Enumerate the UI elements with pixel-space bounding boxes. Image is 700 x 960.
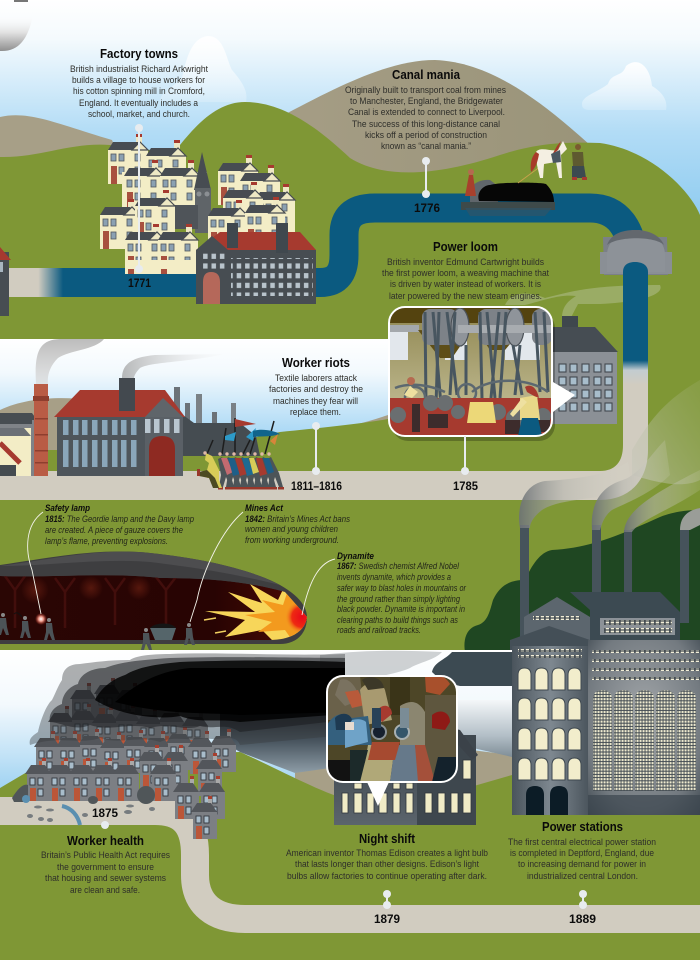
connector: power stations bbox=[579, 890, 587, 909]
connector: night shift bbox=[383, 890, 391, 909]
text block: Dynamite: clearing paths to build things such as bbox=[337, 615, 458, 625]
green patch beside factory bbox=[48, 450, 57, 471]
text block: Mines Act bbox=[245, 503, 350, 545]
text: Night shift body bbox=[286, 848, 488, 882]
green hill: lower section bbox=[0, 752, 512, 840]
connector: worker riots bbox=[312, 422, 320, 475]
text: Power loom body: later powered by the new steam engines. bbox=[389, 291, 542, 302]
tan hill: mid section bbox=[0, 398, 388, 450]
arch: canal aqueduct bbox=[600, 230, 672, 275]
text: Power loom body bbox=[382, 257, 549, 302]
heading: Power stations: Power stations bbox=[542, 819, 623, 834]
illustration: miners bbox=[0, 613, 195, 650]
text block: Dynamite bbox=[337, 551, 467, 635]
text: Canal mania body: Originally built to transport coal from mines bbox=[345, 85, 506, 96]
text block: Safety lamp: are created. A piece of gauze covers the bbox=[45, 525, 183, 535]
sky band: worker riots section bbox=[0, 339, 388, 474]
road: upper bbox=[0, 378, 648, 500]
text: Power stations body: is completed in Deptford, England, due bbox=[510, 848, 654, 859]
illustration: coal barge bbox=[461, 169, 555, 216]
text block: Mines Act: 1842: Britain’s Mines Act bans bbox=[245, 514, 350, 524]
smoke: power station plumes bbox=[519, 380, 700, 532]
text: Worker riots body: machines they fear will bbox=[273, 396, 358, 407]
grey clouds: top of lower section bbox=[320, 651, 442, 690]
text block: Mines Act: women and young children bbox=[245, 524, 338, 534]
callout: night shift illustration bbox=[327, 673, 478, 825]
text: Factory towns body: builds a village to house workers for bbox=[72, 75, 206, 86]
forest: dark green hill bbox=[464, 510, 700, 655]
date: 1785: 1785 bbox=[453, 479, 478, 493]
date: 1875: 1875 bbox=[92, 806, 118, 820]
text: Worker riots body: factories and destroy the bbox=[269, 384, 363, 395]
cloud: top left corner bbox=[0, 15, 33, 51]
text block: Safety lamp: lamp’s flame, preventing explosions. bbox=[45, 536, 168, 546]
date: 1771: 1771 bbox=[128, 276, 151, 290]
illustration: dynamite explosion bbox=[204, 584, 319, 640]
text: Power loom body: is driven by water instead of workers. It is bbox=[390, 279, 541, 290]
text: Power stations body: industrialized central London. bbox=[527, 871, 638, 882]
factory: left sheds bbox=[0, 413, 40, 476]
distant chimneys and sheds bbox=[174, 387, 260, 456]
tan hill: lower section bbox=[295, 745, 512, 810]
factory town village bbox=[100, 134, 295, 274]
chimneys bbox=[520, 525, 689, 640]
text: Factory towns body: school, market, and church. bbox=[88, 109, 190, 120]
green hills: top section bbox=[0, 102, 700, 345]
connector dot: 1875 bbox=[101, 821, 109, 829]
text: Worker riots body: replace them. bbox=[290, 407, 341, 418]
tan hill: left bbox=[0, 115, 120, 160]
heading: Factory towns: Factory towns bbox=[100, 46, 178, 61]
connector: canal mania 1776 bbox=[422, 157, 430, 198]
text: Power stations body: to increasing demand for power in bbox=[518, 859, 646, 870]
text: Canal mania body: to Manchester, England, the Bridgewater bbox=[350, 96, 504, 107]
text: Power loom body: British inventor Edmund Cartwright builds bbox=[387, 257, 544, 268]
heading: Worker health: Worker health bbox=[67, 833, 144, 848]
smoke: loom building bbox=[505, 285, 661, 318]
text: Worker health body: that housing and sewer systems bbox=[45, 873, 166, 884]
text: Worker health body: the government to ensure bbox=[57, 862, 154, 873]
mine tunnel bbox=[0, 551, 319, 650]
text: Factory towns body bbox=[70, 64, 208, 120]
text: Canal mania body: The success of this long-distance canal bbox=[352, 119, 500, 130]
power station bbox=[510, 525, 700, 815]
text: Factory towns body: his cotton spinning mill in Cromford, bbox=[73, 86, 205, 97]
text block: Mines Act: Mines Act bbox=[245, 503, 284, 513]
text: Night shift body: bulbs allow factories to continue operating after dark. bbox=[287, 871, 487, 882]
date: 1776: 1776 bbox=[414, 201, 440, 215]
text block: Mines Act: from working underground. bbox=[245, 535, 339, 545]
text: Canal mania body: known as “canal mania.” bbox=[381, 141, 471, 152]
text block: Dynamite: Dynamite bbox=[337, 551, 374, 561]
text block: Dynamite: roads and railroad tracks. bbox=[337, 625, 421, 635]
worker housing bbox=[12, 678, 236, 839]
smog backdrop over hill bbox=[300, 700, 512, 771]
illustration: rioters with flags bbox=[197, 418, 284, 490]
pointer: loom callout bbox=[553, 382, 575, 412]
heading: Night shift: Night shift bbox=[359, 831, 416, 846]
green gap in front of sheds bbox=[183, 457, 203, 471]
heading: Worker riots: Worker riots bbox=[282, 355, 350, 370]
black smoke over housing bbox=[30, 653, 345, 745]
text block: Dynamite: invents dynamite, which provides a bbox=[337, 572, 451, 582]
factory: top mill bbox=[196, 223, 316, 304]
road: lower bbox=[0, 811, 700, 919]
arched tower windows bbox=[518, 668, 581, 780]
canal: vertical section with fade bbox=[623, 262, 648, 385]
text: Factory towns body: England. It eventually includes a bbox=[79, 98, 199, 109]
roof fragment: top edge bbox=[14, 0, 28, 2]
text block: Dynamite: black powder. Dynamite is important in bbox=[337, 604, 465, 614]
canal: upper waterway bbox=[8, 208, 635, 297]
text: Power loom body: the first power loom, a weaving machine that bbox=[382, 268, 549, 279]
connector: power loom 1785 bbox=[461, 436, 469, 475]
sky: top section bbox=[0, 0, 700, 220]
text: Worker riots body: Textile laborers attack bbox=[275, 373, 357, 384]
callout: power loom illustration bbox=[389, 307, 555, 441]
text: Power stations body bbox=[508, 837, 656, 882]
date: 1811–1816: 1811–1816 bbox=[291, 479, 342, 493]
dark cloud: near power station bbox=[432, 652, 515, 686]
text: Power stations body: The first central electrical power station bbox=[508, 837, 656, 848]
smog dark underlayer bbox=[220, 700, 330, 773]
great hall windows bbox=[593, 690, 696, 791]
building: night shift factory bbox=[334, 725, 478, 825]
text: Canal mania body: kicks off a period of construction bbox=[365, 130, 487, 141]
tan hill: canal mania bbox=[280, 60, 590, 190]
connector: factory towns 1771 bbox=[135, 124, 143, 273]
heading: Power loom: Power loom bbox=[433, 239, 498, 254]
building: behind power loom bbox=[550, 316, 618, 424]
text block: Dynamite: 1867: Swedish chemist Alfred Nobel bbox=[337, 561, 460, 571]
leader lines to mine bbox=[28, 512, 335, 622]
cloud: upper right bbox=[582, 62, 666, 110]
illustration: horse and handler bbox=[518, 141, 587, 183]
text: Worker riots body bbox=[269, 373, 363, 418]
text block: Dynamite: safer way to blast holes in mountains or bbox=[337, 583, 467, 593]
text: Worker health body bbox=[41, 850, 170, 896]
chimney: brick bbox=[33, 384, 49, 476]
date: 1889: 1889 bbox=[569, 912, 596, 926]
text block: Dynamite: the ground rather than simply lighting bbox=[337, 594, 461, 604]
text: Canal mania body bbox=[345, 85, 506, 152]
smoke: left factory bbox=[36, 339, 225, 384]
text block: Safety lamp bbox=[45, 503, 194, 546]
factory: big red roof bbox=[54, 378, 185, 476]
sky: lower section bbox=[0, 650, 512, 805]
text: Canal mania body: Canal is extended to connect to Liverpool. bbox=[348, 107, 505, 118]
stream and rubble on road bbox=[22, 795, 155, 825]
text: Night shift body: that lasts longer than other designs. Edison’s light bbox=[295, 859, 479, 870]
text: Night shift body: American inventor Thomas Edison creates a light bulb bbox=[286, 848, 488, 859]
green hill: mid section bbox=[150, 419, 388, 475]
text: Worker health body: Britain’s Public Health Act requires bbox=[41, 850, 170, 861]
church bbox=[170, 152, 211, 233]
cloud: behind factory towns text bbox=[160, 36, 246, 102]
text: Worker health body: are clean and safe. bbox=[70, 885, 140, 896]
text block: Safety lamp: 1815: The Geordie lamp and the Davy lamp bbox=[45, 514, 194, 524]
date: 1879: 1879 bbox=[374, 912, 400, 926]
text: Factory towns body: British industrialist Richard Arkwright bbox=[70, 64, 208, 75]
text block: Safety lamp: Safety lamp bbox=[45, 503, 90, 513]
building: left edge of top section bbox=[0, 247, 11, 316]
heading: Canal mania: Canal mania bbox=[392, 67, 461, 82]
